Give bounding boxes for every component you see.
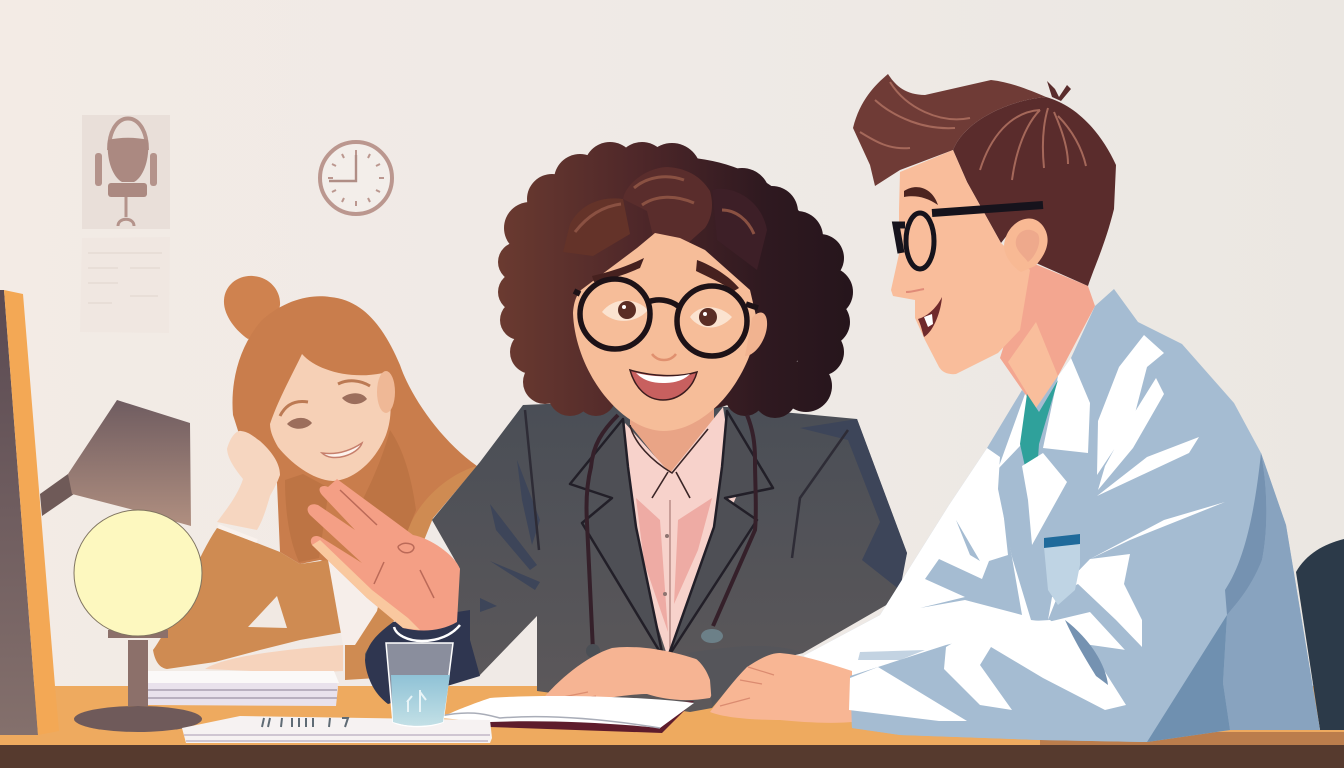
hair bun xyxy=(224,276,280,339)
man in lab coat xyxy=(710,74,1320,742)
hair strands xyxy=(860,82,1086,180)
arm on desk xyxy=(205,645,343,673)
desk lamp xyxy=(40,400,202,732)
ear xyxy=(745,312,767,356)
white collar xyxy=(998,358,1090,469)
white left side of coat xyxy=(803,448,1125,700)
lower sleeve highlights xyxy=(849,620,1126,721)
jacket sleeve xyxy=(687,646,803,706)
background woman xyxy=(153,276,477,680)
pocket trim xyxy=(1044,534,1080,548)
pink shirt xyxy=(611,407,737,655)
mouth xyxy=(918,297,942,337)
open notebook xyxy=(440,696,694,733)
white cuff xyxy=(394,625,460,641)
eyebrow xyxy=(904,187,938,205)
neck xyxy=(630,405,714,475)
blouse xyxy=(328,560,385,645)
book stack xyxy=(146,671,339,706)
man's hand xyxy=(710,653,852,723)
hair swirl highlights xyxy=(623,167,712,244)
hair front xyxy=(853,74,1046,186)
white lapel xyxy=(1022,453,1067,545)
glowing globe xyxy=(74,510,202,636)
notice sheet xyxy=(80,237,170,333)
lower sleeve xyxy=(850,632,1147,742)
eyes xyxy=(602,300,648,321)
ear xyxy=(377,371,395,413)
poster: chair icon xyxy=(82,115,170,229)
desk xyxy=(0,686,1344,768)
lamp stand xyxy=(108,630,168,706)
paper stack with printed marks xyxy=(182,716,492,743)
hair dark xyxy=(953,97,1116,286)
suit jacket xyxy=(365,400,907,712)
left lapel xyxy=(570,419,663,657)
eyes xyxy=(287,393,367,429)
hair tuft xyxy=(1047,81,1071,101)
desk front edge xyxy=(0,745,1344,768)
long hair xyxy=(232,296,477,590)
lamp shade xyxy=(68,400,191,526)
resting hand xyxy=(542,647,716,702)
blazer xyxy=(153,466,477,680)
curly hair xyxy=(498,142,853,418)
jacket shadow folds xyxy=(480,419,907,612)
hair strands xyxy=(285,430,416,565)
curly-haired woman xyxy=(308,142,907,712)
glasses xyxy=(574,279,758,356)
smiling mouth xyxy=(630,370,697,400)
neck xyxy=(1000,262,1095,408)
lamp arm xyxy=(40,474,74,516)
eyebrows xyxy=(592,258,739,291)
office chair xyxy=(1296,539,1344,730)
face xyxy=(270,354,391,481)
glass of water xyxy=(386,643,453,726)
sleeve shadow xyxy=(1065,620,1108,685)
sleeve cuff xyxy=(365,610,480,704)
nose xyxy=(652,354,676,360)
hand on cheek xyxy=(217,431,280,530)
mouth xyxy=(322,443,362,458)
white shoulder highlights xyxy=(1090,335,1225,559)
ear xyxy=(1004,219,1048,272)
face xyxy=(573,233,757,431)
coat darker back xyxy=(1223,453,1320,730)
right lapel xyxy=(668,411,773,657)
teal scrubs xyxy=(1020,380,1058,543)
stethoscope xyxy=(586,415,756,651)
eyebrows xyxy=(280,381,370,416)
pocket xyxy=(1044,544,1080,605)
glasses xyxy=(896,205,1043,269)
big white chest fold xyxy=(1048,554,1142,647)
raised hand xyxy=(308,479,460,630)
wall clock xyxy=(320,142,392,214)
face xyxy=(891,150,1030,374)
lab coat xyxy=(803,289,1320,742)
monitor xyxy=(0,290,59,735)
blue folds in white side xyxy=(920,500,1022,615)
